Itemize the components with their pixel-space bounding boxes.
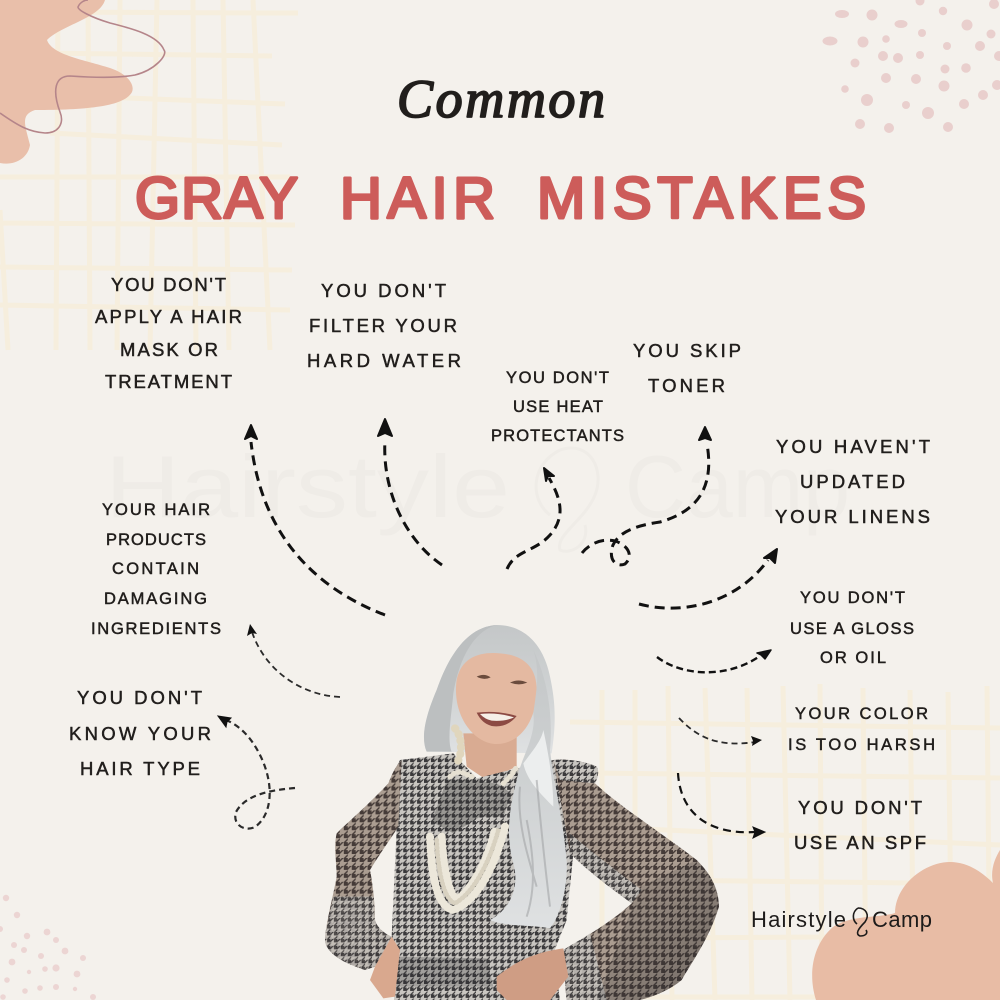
arrow: heat protectants bbox=[507, 468, 560, 569]
text: toner: YOU SKIP bbox=[633, 340, 741, 361]
text: toner bbox=[633, 340, 741, 396]
heading: gray hair mistakes: MISTAKES bbox=[537, 166, 866, 231]
sleeve shading bbox=[597, 860, 719, 1000]
arrow: toner bbox=[582, 427, 711, 565]
sleeve left bbox=[325, 760, 402, 970]
hair left strand bbox=[424, 625, 497, 752]
logo: Hairstyle Camp: Hairstyle bbox=[751, 907, 846, 932]
text: hair products: YOUR HAIR bbox=[102, 501, 210, 519]
arrow: color too harsh bbox=[679, 718, 762, 746]
text: gloss or oil: USE A GLOSS bbox=[790, 620, 914, 638]
heading: gray hair mistakes: GRAY bbox=[135, 166, 298, 231]
text: spf: YOU DON'T bbox=[798, 797, 922, 818]
text: hair products: INGREDIENTS bbox=[91, 620, 221, 638]
title: Common: Common bbox=[397, 69, 605, 129]
logo icon: hair strand bbox=[853, 908, 867, 936]
earring bbox=[455, 728, 461, 763]
hand right bbox=[497, 948, 568, 1000]
text: hair type bbox=[69, 687, 211, 779]
sleeve right bbox=[553, 760, 719, 1000]
text: color too harsh: YOUR COLOR bbox=[795, 705, 928, 723]
text: hard water: FILTER YOUR bbox=[309, 315, 457, 336]
bow bbox=[432, 780, 512, 833]
heading: gray hair mistakes: HAIR bbox=[340, 166, 495, 231]
eyes and mouth bbox=[477, 675, 527, 684]
dots: top right bbox=[822, 0, 1000, 133]
grid pattern: bottom right bbox=[570, 684, 1000, 1000]
arrow: hair type bbox=[218, 716, 295, 829]
text: linens: UPDATED bbox=[800, 471, 905, 492]
logo: Hairstyle Camp: Camp bbox=[872, 907, 932, 932]
text: hard water: HARD WATER bbox=[307, 350, 461, 371]
text: hard water: YOU DON'T bbox=[321, 280, 446, 301]
text: hair mask: TREATMENT bbox=[105, 371, 232, 392]
text: hair type: HAIR TYPE bbox=[80, 758, 200, 779]
text: hair type: YOU DON'T bbox=[77, 687, 202, 708]
text: hard water bbox=[307, 280, 461, 371]
arrow: hard water bbox=[378, 419, 442, 565]
dots: bottom left bbox=[0, 895, 96, 1000]
text: hair products: PRODUCTS bbox=[106, 531, 206, 549]
text: gloss or oil: YOU DON'T bbox=[800, 589, 905, 607]
logo: Hairstyle Camp bbox=[751, 907, 932, 936]
arrow: spf bbox=[678, 773, 765, 838]
blob: bottom right bbox=[812, 850, 1000, 1000]
grid pattern: top left bbox=[0, 0, 298, 350]
hair back bbox=[424, 625, 555, 753]
text: hair mask: YOU DON'T bbox=[111, 274, 226, 295]
arrow: hair mask bbox=[245, 425, 385, 615]
text: linens: YOU HAVEN'T bbox=[776, 436, 930, 457]
text: spf: USE AN SPF bbox=[794, 832, 926, 853]
torso bbox=[392, 753, 573, 1000]
arrow: hair products bbox=[247, 624, 340, 697]
face bbox=[456, 653, 537, 744]
text: gloss or oil: OR OIL bbox=[820, 649, 886, 667]
text: hair type: KNOW YOUR bbox=[69, 723, 211, 744]
arrow: linens bbox=[639, 549, 777, 608]
person: woman with long gray hair bbox=[325, 625, 719, 1000]
text: spf bbox=[794, 797, 926, 853]
text: heat protectants: YOU DON'T bbox=[506, 369, 609, 387]
watermark: Camp bbox=[625, 437, 850, 536]
watermark bbox=[105, 437, 850, 551]
text: hair products: CONTAIN bbox=[112, 560, 199, 578]
text: gloss or oil bbox=[790, 589, 914, 667]
watermark: Hairstyle bbox=[105, 437, 510, 536]
text: hair mask bbox=[95, 274, 242, 392]
text: color too harsh bbox=[788, 705, 935, 754]
blob: top left with line bbox=[0, 0, 165, 164]
hair front bbox=[490, 650, 567, 928]
text: hair mask: APPLY A HAIR bbox=[95, 306, 242, 327]
pearl necklace bbox=[430, 827, 505, 910]
collar pearls bbox=[450, 767, 517, 783]
text: heat protectants: PROTECTANTS bbox=[491, 427, 624, 445]
belt bbox=[394, 957, 495, 1000]
text: heat protectants: USE HEAT bbox=[513, 398, 603, 416]
hand left bbox=[370, 937, 400, 998]
text: hair products bbox=[91, 501, 221, 638]
neck bbox=[463, 733, 517, 780]
arrow: gloss or oil bbox=[657, 650, 771, 672]
heading: gray hair mistakes bbox=[135, 166, 866, 231]
text: toner: TONER bbox=[648, 375, 725, 396]
text: color too harsh: IS TOO HARSH bbox=[788, 736, 935, 754]
text: linens: YOUR LINENS bbox=[775, 506, 930, 527]
text: hair products: DAMAGING bbox=[104, 590, 207, 608]
text: linens bbox=[775, 436, 930, 527]
text: heat protectants bbox=[491, 369, 624, 445]
text: hair mask: MASK OR bbox=[120, 339, 218, 360]
